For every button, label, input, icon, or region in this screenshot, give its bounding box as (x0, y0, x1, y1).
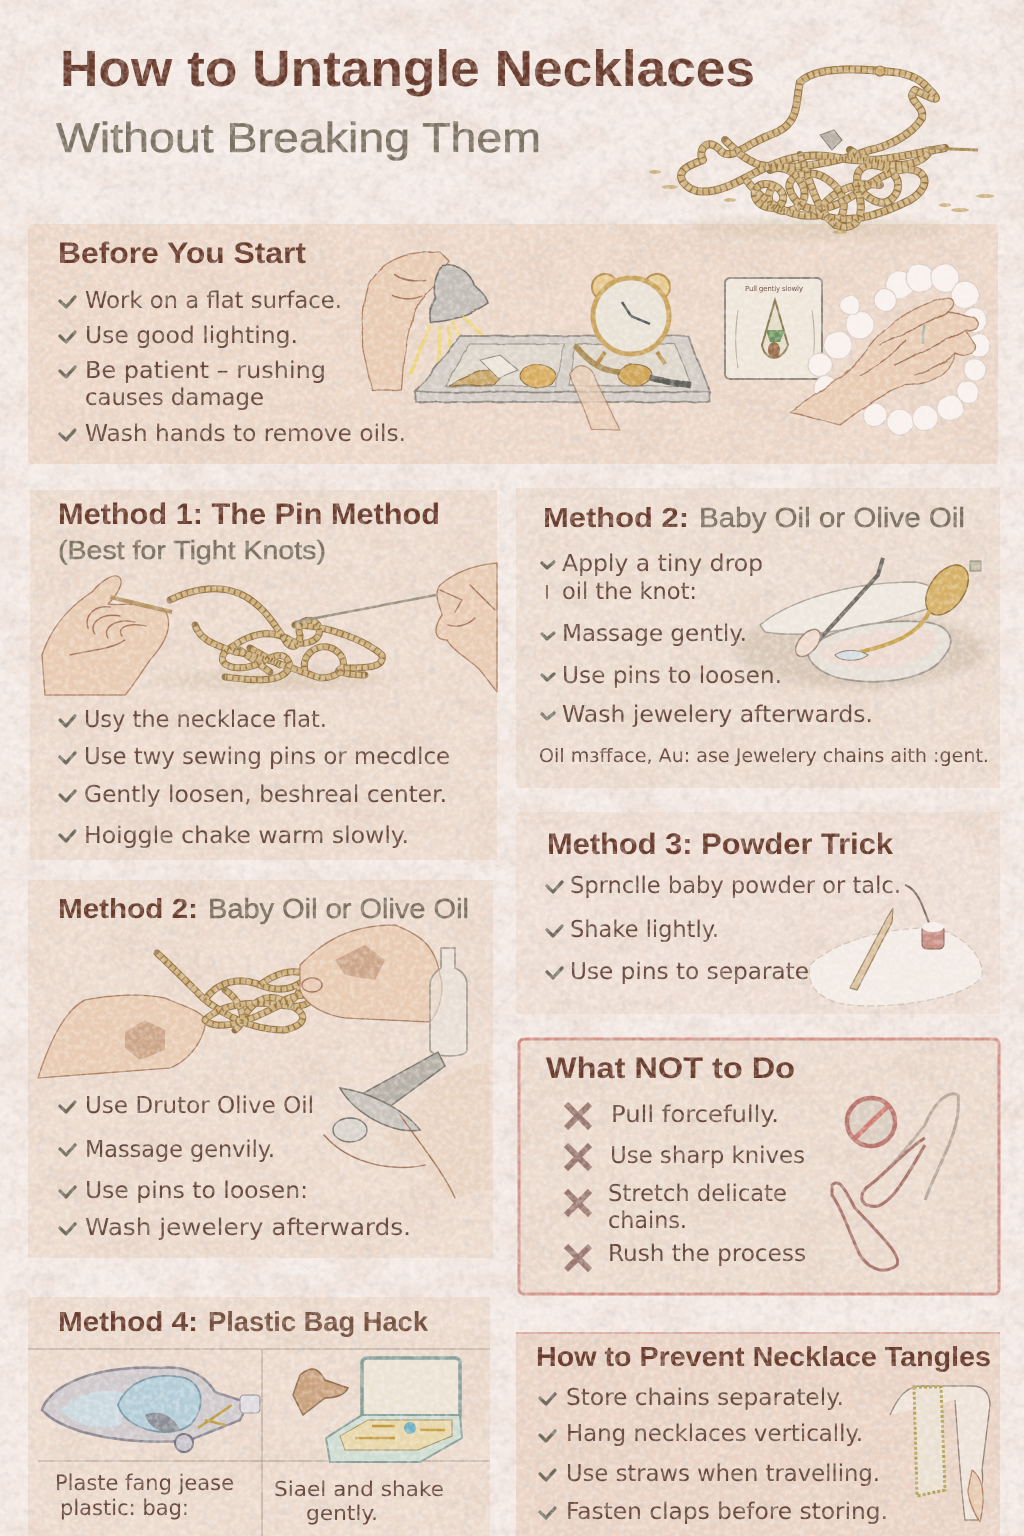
checklist: Use pins to loosen. (562, 663, 782, 689)
icon: instruction card: Pull gently slowly (745, 285, 803, 293)
checklist (60, 288, 406, 447)
heading: Before You Start (58, 237, 306, 270)
panel: what not to do (546, 1052, 958, 1270)
checklist: Fasten claps before storing. (566, 1499, 888, 1525)
checklist (547, 873, 901, 985)
checklist: Store chains separately. (566, 1385, 844, 1411)
checklist: Hang necklaces vertically. (566, 1421, 863, 1447)
heading: How to Prevent Necklace Tangles (536, 1341, 991, 1372)
icon: washing hands with foam (790, 264, 990, 435)
icon: tray with jewelry (416, 336, 710, 430)
checklist: causes damage (85, 385, 264, 411)
icon: prohibition sign (847, 1098, 895, 1146)
heading: Method 3: Powder Trick (547, 828, 893, 861)
checklist: Hoiggle chake warm slowly. (84, 823, 409, 849)
icon: tool and hand (324, 1052, 490, 1198)
panel: method 4 (28, 1306, 490, 1536)
checklist: Use Drutor Olive Oil (85, 1093, 314, 1119)
panel: method 1 (42, 498, 497, 849)
heading: Method 2: (543, 502, 689, 533)
checklist: Use straws when travelling. (566, 1461, 880, 1487)
heading: Baby Oil or Olive Oil (208, 893, 469, 924)
captions: plastic: bag: (60, 1496, 189, 1520)
icon: hand holding lamp (362, 252, 492, 390)
captions: Siael and shake (274, 1477, 444, 1501)
illustration: hands and pin (42, 563, 497, 695)
checklist: Be patient – rushing (85, 358, 326, 384)
checklist: Wash jewelery afterwards. (85, 1215, 411, 1241)
panel: method 2 left (38, 893, 490, 1241)
heading: Plastic Bag Hack (208, 1306, 428, 1337)
heading (543, 502, 965, 533)
checklist: Usy the necklace flat. (84, 707, 327, 733)
heading: What NOT to Do (546, 1052, 795, 1085)
captions: Plaste fang jease (55, 1471, 234, 1495)
heading (58, 1306, 428, 1337)
heading (58, 893, 469, 924)
title: How to Untangle Necklaces (60, 40, 755, 97)
subheading: (Best for Tight Knots) (58, 535, 326, 565)
checklist (540, 1385, 888, 1525)
checklist: Apply a tiny drop (562, 551, 763, 577)
checklist: Use good lighting. (85, 323, 298, 349)
footnote: Oil mɜfface, Au: ase Jewelery chains aith :gent. (539, 745, 989, 767)
icon: stretched chain loops (832, 1094, 958, 1270)
icon: instruction card (725, 278, 822, 379)
panel: prevent tangles (536, 1341, 991, 1525)
checklist (542, 551, 873, 728)
list of mistakes: chains. (608, 1208, 687, 1234)
panel: before you start (58, 237, 990, 447)
list of mistakes: Pull forcefully. (611, 1102, 779, 1128)
heading: Method 4: (58, 1306, 198, 1337)
checklist: Shake lightly. (570, 917, 719, 943)
checklist: Use pins to loosen: (85, 1178, 308, 1204)
illustration: tangled necklace (649, 66, 994, 240)
captions: gently. (306, 1501, 378, 1525)
checklist: Use pins to separate (570, 959, 809, 985)
checklist (60, 1093, 411, 1241)
illustration: bowl spoon and oil (735, 557, 985, 688)
panel: method 2 right (539, 502, 989, 767)
subtitle: Without Breaking Them (56, 114, 541, 161)
list of mistakes: Stretch delicate (608, 1181, 787, 1207)
captions (55, 1471, 444, 1525)
frame lines (28, 1349, 490, 1536)
list of mistakes: Use sharp knives (610, 1143, 805, 1169)
checklist: Wash jewelery afterwards. (562, 702, 873, 728)
checklist: Massage genvily. (85, 1137, 275, 1163)
checklist: Use twy sewing pins or mecdlce (84, 744, 450, 770)
heading: Baby Oil or Olive Oil (699, 502, 965, 533)
checklist: Work on a flat surface. (85, 288, 342, 314)
heading: Method 2: (58, 893, 198, 924)
panel: method 3 (547, 828, 982, 1006)
icon: alarm clock (592, 274, 670, 364)
checklist: Massage gently. (562, 621, 747, 647)
icon: plastic bag (42, 1367, 260, 1452)
illustration: hands with oil and knot (38, 925, 490, 1198)
icon: oil bottle (430, 948, 467, 1056)
list of mistakes: Rush the process (608, 1241, 806, 1267)
icon: pouch and jewelry box (293, 1358, 462, 1462)
checklist: Sprnclle baby powder or talc. (570, 873, 901, 899)
illustration: powder and pin (809, 885, 982, 1006)
heading: Method 1: The Pin Method (58, 498, 440, 531)
list of mistakes (566, 1102, 806, 1270)
checklist: Gently loosen, beshreal center. (84, 782, 447, 808)
checklist: Wash hands to remove oils. (85, 421, 406, 447)
illustration: hanging fabric and strap (890, 1386, 990, 1522)
checklist (60, 707, 450, 849)
checklist: oil the knot: (562, 579, 697, 605)
